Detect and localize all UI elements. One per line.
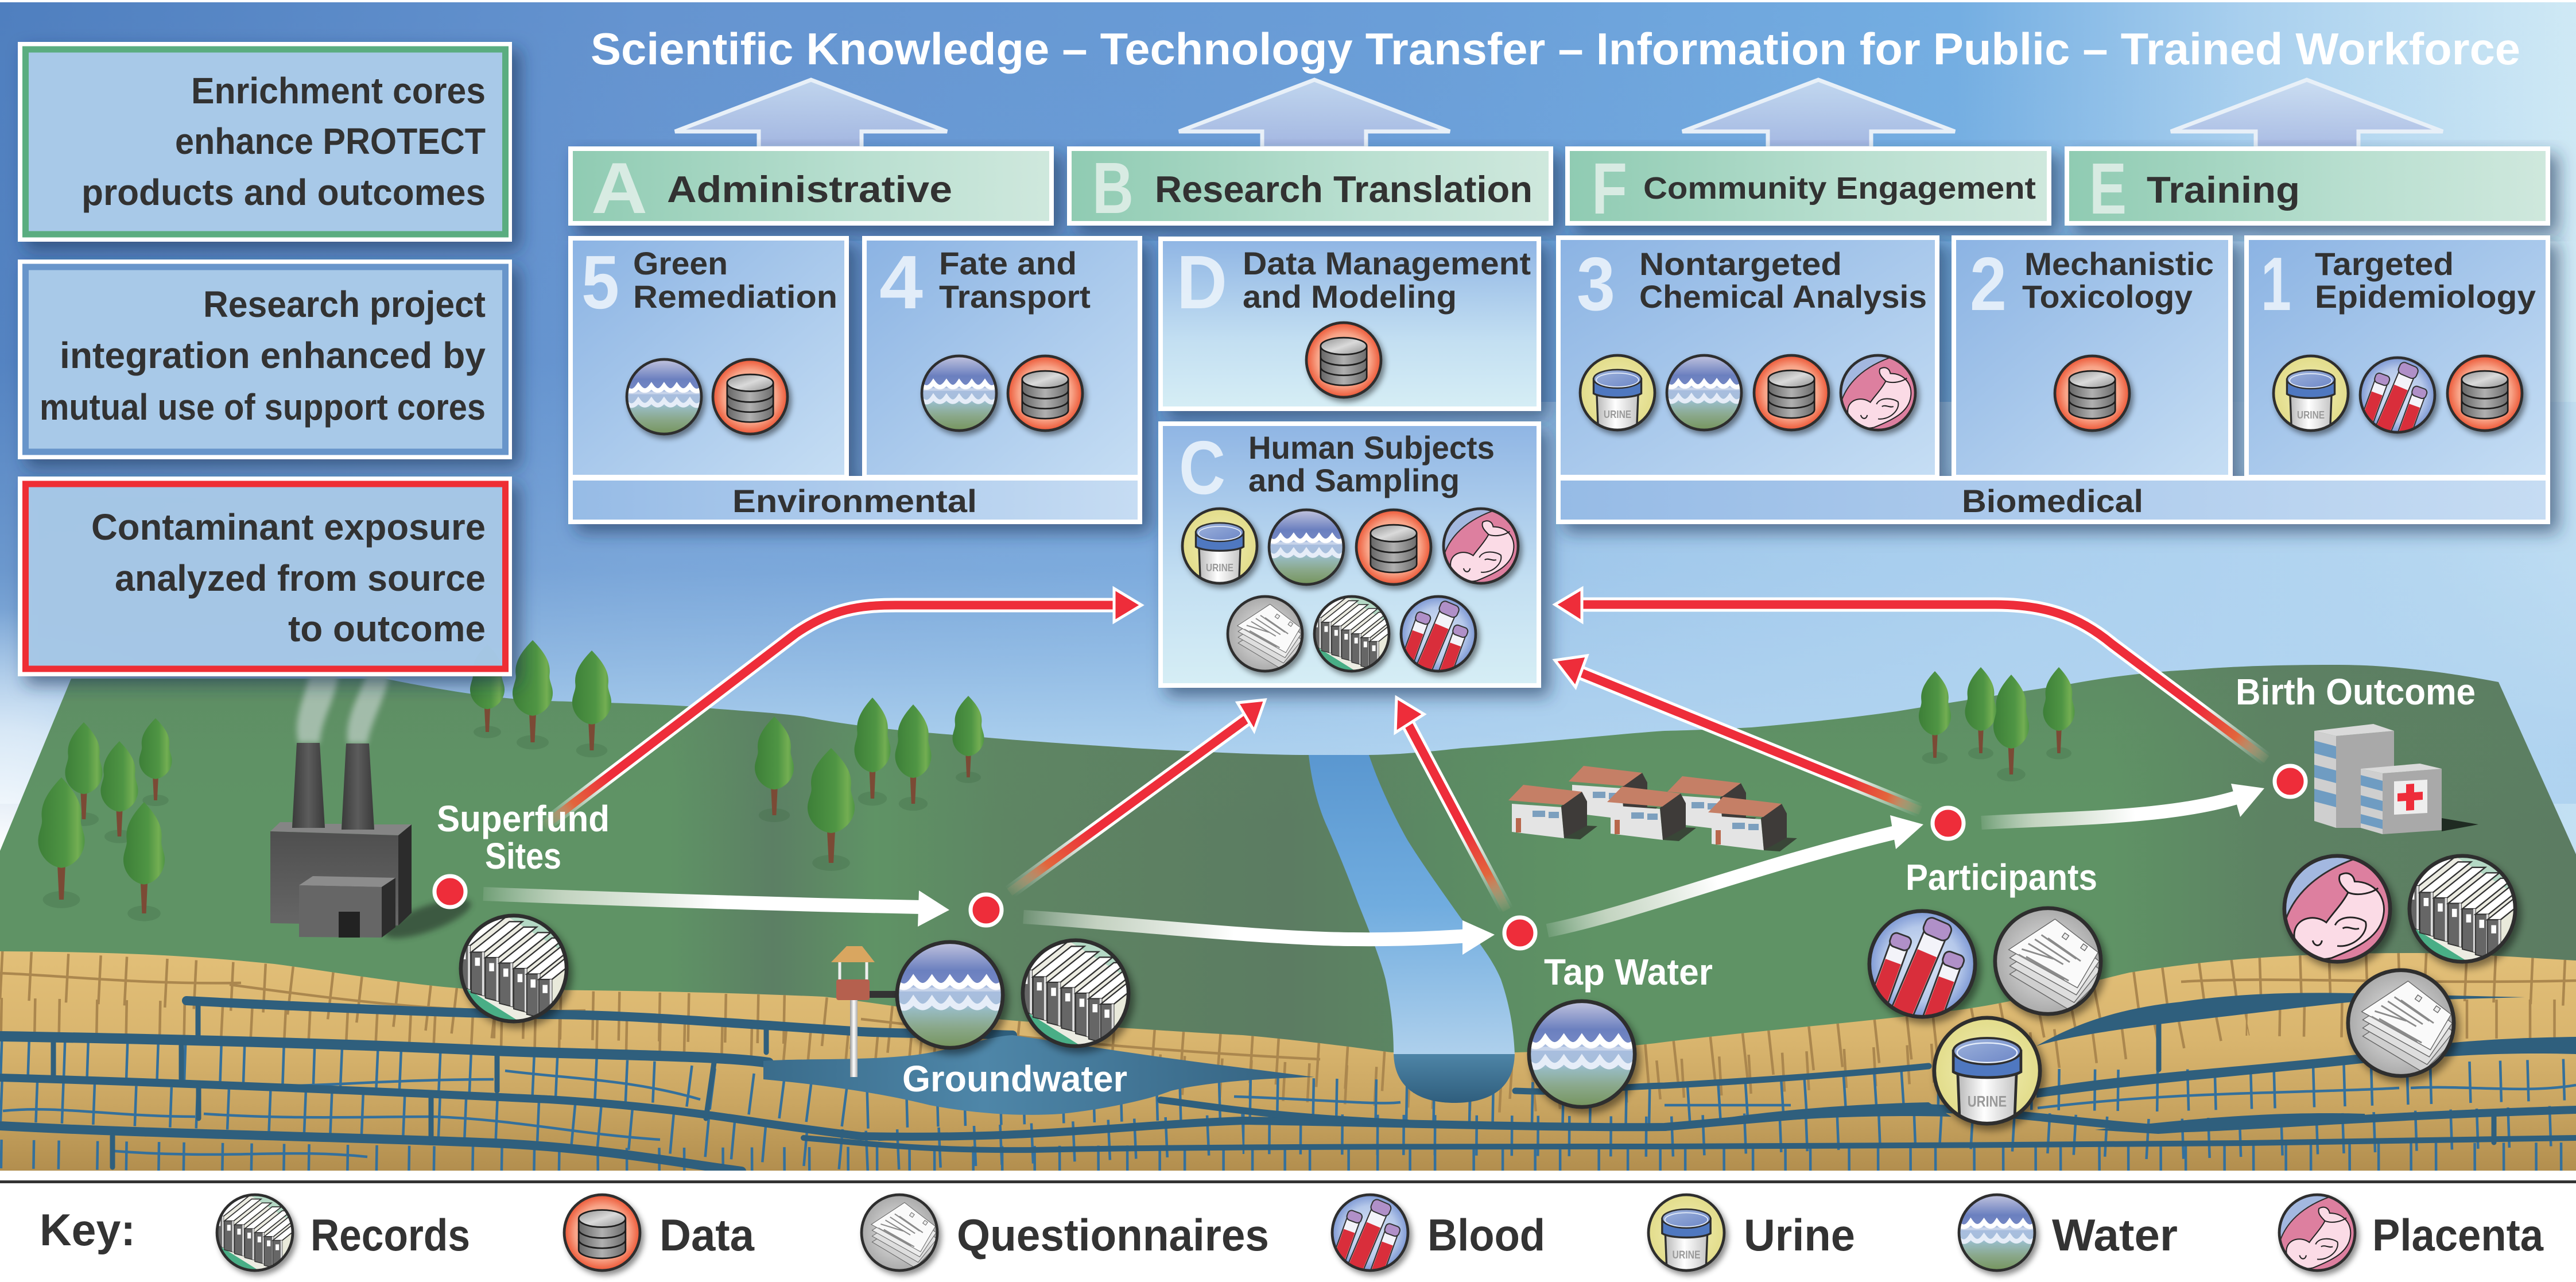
hospital (2314, 724, 2478, 834)
key item: Urine (1648, 1194, 1855, 1272)
key band (0, 1171, 2576, 1282)
project 3 Nontargeted Chemical Analysis: Chemical Analysis (1639, 278, 1927, 315)
legend box: enrichment cores: enhance PROTECT (175, 121, 486, 162)
key (40, 1194, 2544, 1282)
legend box: contaminant exposure: analyzed from source (115, 557, 486, 599)
key item: Water (1958, 1194, 2178, 1271)
panel: Community Engagement: F (1592, 148, 1627, 229)
panel: Research Translation: B (1092, 148, 1134, 228)
project 5 Green Remediation: Green (633, 245, 728, 281)
legend box: research integration: Research project (203, 284, 486, 325)
project 2 Mechanistic Toxicology: Mechanistic (2024, 246, 2214, 282)
river (1309, 755, 1515, 1103)
title: Scientific Knowledge – Technology Transfer – Information for Public – Trained Workforce (591, 24, 2520, 74)
panel: C Human Subjects and Sampling (1161, 424, 1539, 685)
legend boxes (20, 44, 510, 674)
panel: Training (2067, 148, 2548, 229)
project 2 Mechanistic Toxicology (1954, 238, 2230, 477)
key item: Blood: Blood (1427, 1210, 1545, 1260)
node: Participants (1865, 808, 2102, 1125)
panel: Administrative (571, 148, 1052, 228)
houses (1508, 766, 1797, 851)
key item: Urine: URINE (1673, 1249, 1700, 1261)
panel: Community Engagement: Community Engagement (1643, 171, 2036, 206)
Environmental strip (571, 478, 1140, 522)
key item: Urine: Urine (1744, 1210, 1855, 1260)
panel: D Data Management and Modeling (1161, 239, 1539, 409)
legend box: enrichment cores: Enrichment cores (191, 70, 486, 111)
key item: Records (214, 1194, 470, 1272)
Biomedical strip (1558, 478, 2548, 522)
project 3 Nontargeted Chemical Analysis (1558, 238, 1937, 477)
key item: Placenta: Placenta (2372, 1210, 2544, 1260)
trees (38, 640, 2075, 921)
node: Superfund Sites (434, 798, 610, 1023)
legend box: contaminant exposure (20, 479, 510, 674)
panel: Biomedical group (1558, 238, 2548, 522)
project 5 Green Remediation (571, 238, 847, 477)
white arrow: Groundwater to Tap Water (1023, 917, 1495, 955)
key item: Blood (1329, 1194, 1545, 1282)
key item: Questionnaires: Questionnaires (957, 1210, 1269, 1260)
legend box: research integration (20, 262, 510, 457)
node: Tap Water: Tap Water (1544, 951, 1713, 993)
project 3 Nontargeted Chemical Analysis: 3 (1577, 242, 1615, 326)
project 3 Nontargeted Chemical Analysis: URINE (1604, 408, 1631, 420)
panel: C Human Subjects and Sampling: and Sampling (1248, 462, 1460, 498)
node: Birth Outcome (2236, 671, 2539, 1076)
key item: Records: Records (311, 1210, 470, 1260)
groundwater pool (763, 1035, 1314, 1115)
panel: D Data Management and Modeling: Data Management (1243, 245, 1531, 281)
red arrow: Superfund to sampling (544, 588, 1142, 826)
ground hill (0, 665, 2576, 1091)
node: Superfund Sites: Superfund (437, 798, 610, 839)
node: Superfund Sites: Sites (485, 835, 561, 877)
project 5 Green Remediation: Remediation (633, 278, 837, 315)
legend box: enrichment cores (20, 44, 510, 239)
white arrow: Superfund to Groundwater (483, 890, 949, 927)
node: Tap Water (1504, 917, 1713, 1107)
panel: C Human Subjects and Sampling: URINE (1206, 561, 1233, 574)
legend box: research integration: integration enhanced by (60, 335, 486, 376)
white arrow: Tap Water to Participants (1547, 815, 1923, 931)
key item: Data: Data (659, 1210, 755, 1260)
legend box: research integration: mutual use of support cores (40, 386, 486, 428)
panel: Environmental group (571, 238, 1140, 522)
project 4 Fate and Transport: Fate and (939, 245, 1077, 281)
soil strata (0, 942, 2576, 1171)
key item: Placenta (2278, 1194, 2544, 1276)
panel: Community Engagement (1568, 148, 2049, 229)
node: Birth Outcome: Birth Outcome (2236, 671, 2476, 712)
project 1 Targeted Epidemiology (2247, 238, 2548, 477)
panel: Administrative: A (591, 148, 647, 228)
key heading: Key: (40, 1204, 135, 1255)
Environmental strip: Environmental (732, 483, 977, 519)
project 2 Mechanistic Toxicology: Toxicology (2022, 278, 2193, 315)
project 1 Targeted Epidemiology: Epidemiology (2315, 278, 2536, 315)
red arrow: Birth Outcome to sampling (1555, 588, 2267, 760)
Biomedical strip: Biomedical (1962, 483, 2143, 519)
project 4 Fate and Transport (864, 238, 1140, 477)
project 5 Green Remediation: 5 (581, 240, 619, 324)
project 3 Nontargeted Chemical Analysis: Nontargeted (1639, 246, 1842, 282)
key item: Questionnaires (861, 1194, 1269, 1271)
node: Participants: URINE (1968, 1093, 2007, 1110)
panel: Training: Training (2147, 169, 2300, 211)
project 1 Targeted Epidemiology: 1 (2261, 242, 2291, 326)
up arrows (675, 80, 2443, 148)
white arrow: Participants to Birth Outcome (1981, 784, 2264, 823)
panel: Research Translation: Research Translation (1155, 168, 1533, 210)
factory (270, 672, 475, 946)
node: Groundwater (895, 894, 1152, 1099)
key item: Data (564, 1194, 755, 1271)
project 1 Targeted Epidemiology: URINE (2297, 409, 2325, 421)
panel: D Data Management and Modeling: D (1177, 240, 1227, 324)
panel: C Human Subjects and Sampling: C (1179, 425, 1225, 510)
red arrow: Groundwater to sampling (1010, 700, 1265, 892)
key item: Water: Water (2052, 1210, 2178, 1260)
legend box: enrichment cores: products and outcomes (82, 172, 486, 213)
panel: Training: E (2089, 148, 2127, 229)
project 2 Mechanistic Toxicology: 2 (1970, 242, 2007, 326)
project 4 Fate and Transport: 4 (879, 240, 923, 324)
project 4 Fate and Transport: Transport (939, 278, 1091, 315)
well (831, 946, 898, 1077)
node: Participants: Participants (1906, 857, 2097, 898)
project 1 Targeted Epidemiology: Targeted (2315, 246, 2454, 282)
node: Groundwater: Groundwater (902, 1058, 1127, 1099)
legend box: contaminant exposure: Contaminant exposure (91, 506, 486, 548)
panel: Research Translation (1069, 148, 1551, 228)
panel: D Data Management and Modeling: and Modeling (1243, 278, 1457, 315)
red arrow: Tap Water to sampling (1395, 698, 1507, 910)
legend box: contaminant exposure: to outcome (288, 608, 486, 649)
panel: Administrative: Administrative (667, 168, 952, 210)
red arrow: Participants to sampling (1555, 656, 1921, 811)
panel: C Human Subjects and Sampling: Human Subjects (1248, 429, 1495, 466)
